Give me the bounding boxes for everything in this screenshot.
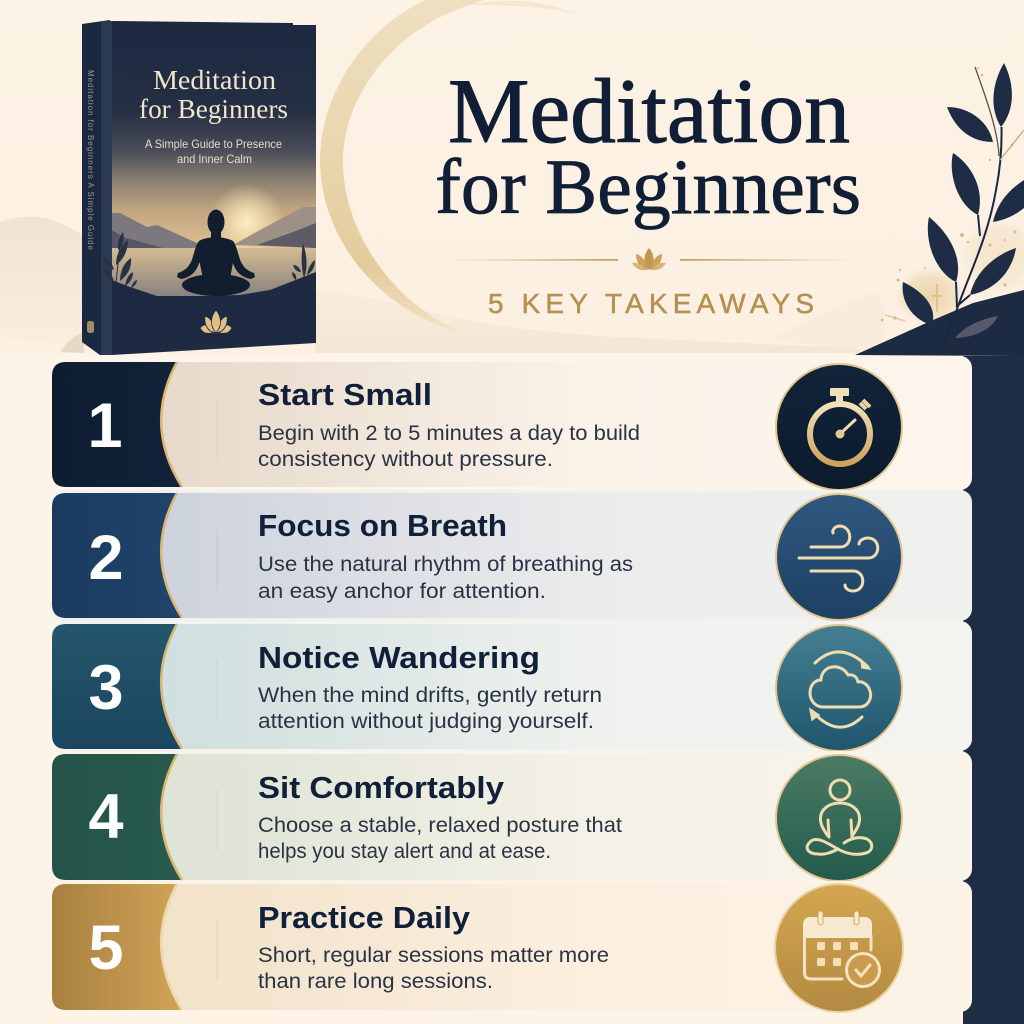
card 4 background bbox=[52, 751, 972, 881]
number badge 4 bbox=[52, 754, 182, 880]
leaf 4 bbox=[993, 180, 1024, 222]
icon: calendar with check bbox=[775, 884, 903, 1012]
heading and body 3: Notice Wandering bbox=[258, 640, 540, 675]
leaf 3 bbox=[952, 153, 980, 215]
heading and body 2: Use the natural rhythm of breathing as bbox=[258, 553, 633, 576]
book bbox=[82, 20, 316, 355]
book title text: and Inner Calm bbox=[177, 152, 252, 166]
heading and body 3: When the mind drifts, gently return bbox=[258, 684, 602, 707]
number badge 3: 3 bbox=[88, 653, 124, 723]
heading and body 4: helps you stay alert and at ease. bbox=[258, 840, 551, 863]
heading and body 1: consistency without pressure. bbox=[258, 448, 553, 471]
book spine: Meditation for Beginners A Simple Guide bbox=[86, 70, 95, 251]
takeaway 1 bbox=[52, 356, 972, 490]
botanical branch bbox=[903, 63, 1024, 352]
header background with soft hills bbox=[0, 0, 1024, 353]
book meditating silhouette bbox=[177, 210, 255, 296]
heading and body 1: Start Small bbox=[258, 377, 432, 412]
heading and body 1 bbox=[258, 377, 640, 471]
heading and body 1: Begin with 2 to 5 minutes a day to build bbox=[258, 422, 640, 445]
takeaway 5 bbox=[52, 881, 972, 1012]
leaf 5 bbox=[928, 217, 958, 282]
number badge 1 bbox=[52, 362, 182, 487]
takeaway 2 bbox=[52, 490, 972, 621]
heading and body 3: attention without judging yourself. bbox=[258, 710, 594, 733]
icon: cloud with circular arrows bbox=[776, 625, 902, 751]
heading and body 3 bbox=[258, 640, 602, 733]
icon: stopwatch bbox=[776, 364, 902, 490]
number badge 1: 1 bbox=[87, 391, 123, 461]
book title text bbox=[139, 65, 288, 166]
heading and body 2: Focus on Breath bbox=[258, 508, 507, 543]
navy side band and hill bbox=[855, 290, 1024, 1024]
main title: Meditation bbox=[448, 60, 850, 162]
book lotus bbox=[200, 310, 232, 333]
number badge 5 bbox=[52, 884, 182, 1010]
heading and body 4 bbox=[258, 770, 622, 863]
icon: meditating person bbox=[776, 755, 902, 881]
number badge 3 bbox=[52, 624, 182, 749]
heading and body 5: than rare long sessions. bbox=[258, 970, 493, 993]
heading and body 4: Sit Comfortably bbox=[258, 770, 505, 805]
book plants bbox=[102, 232, 315, 288]
takeaway 3 bbox=[52, 621, 972, 751]
number badge 2: 2 bbox=[88, 523, 124, 593]
divider with lotus bbox=[445, 248, 855, 270]
main title: for Beginners bbox=[435, 143, 861, 230]
card 2 background bbox=[52, 490, 972, 621]
main title bbox=[435, 60, 861, 230]
card 1 background bbox=[52, 356, 972, 490]
icon: wind bbox=[776, 494, 902, 620]
leaf 1 bbox=[993, 63, 1012, 127]
heading and body 2 bbox=[258, 508, 633, 603]
takeaway 4 bbox=[52, 751, 972, 881]
number badge 5: 5 bbox=[88, 913, 124, 983]
enso brush circle bbox=[320, 0, 575, 333]
heading and body 2: an easy anchor for attention. bbox=[258, 580, 546, 603]
book cover art bbox=[112, 21, 316, 355]
heading and body 5: Short, regular sessions matter more bbox=[258, 944, 609, 967]
subtitle: 5 KEY TAKEAWAYS bbox=[488, 288, 814, 319]
number badge 4: 4 bbox=[88, 782, 124, 852]
leaf 7 bbox=[903, 282, 933, 325]
book spine bbox=[82, 20, 112, 355]
leaf 2 bbox=[947, 107, 993, 142]
number badge 2 bbox=[52, 493, 182, 618]
leaf 6 bbox=[970, 248, 1016, 295]
gold splash behind branch bbox=[881, 67, 1024, 326]
book title text: for Beginners bbox=[139, 94, 288, 124]
book title text: Meditation bbox=[153, 65, 277, 95]
book title text: A Simple Guide to Presence bbox=[145, 137, 282, 151]
card 3 background bbox=[52, 621, 972, 751]
heading and body 5 bbox=[258, 900, 609, 993]
card 5 background bbox=[52, 881, 972, 1012]
heading and body 5: Practice Daily bbox=[258, 900, 471, 935]
heading and body 4: Choose a stable, relaxed posture that bbox=[258, 814, 622, 837]
